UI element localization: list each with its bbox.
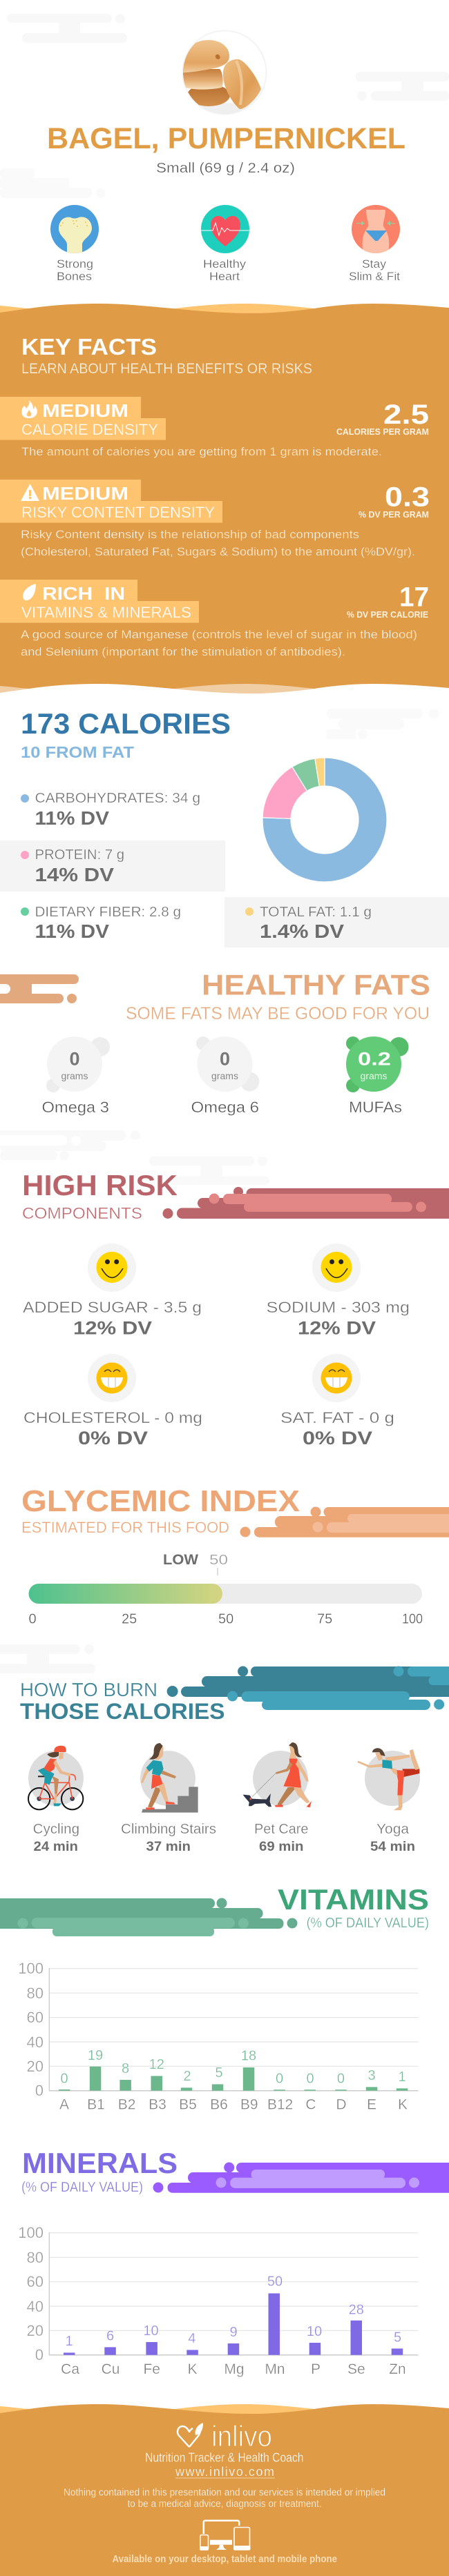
fact: risky content density: % DV PER GRAM bbox=[359, 510, 429, 520]
bar chart: vitamins: 8 bbox=[122, 2061, 129, 2076]
macro: protein bbox=[0, 840, 225, 892]
bar chart: minerals: 9 bbox=[229, 2325, 238, 2340]
risk item: added sugar: ADDED SUGAR - 3.5 g bbox=[23, 1299, 202, 1316]
bar chart: minerals: 80 bbox=[27, 2249, 44, 2266]
bar chart: minerals: Cu bbox=[102, 2361, 120, 2377]
bar chart: minerals: Fe bbox=[143, 2361, 160, 2377]
bar chart: vitamins: B9 bbox=[240, 2096, 258, 2113]
fact: risky content density bbox=[0, 480, 430, 558]
glycemic gauge: 25 bbox=[122, 1612, 137, 1627]
fact: calorie density: MEDIUM bbox=[42, 400, 128, 421]
macro: total fat bbox=[224, 897, 449, 947]
activity: yoga: Yoga bbox=[376, 1822, 410, 1837]
activity: yoga bbox=[357, 1748, 420, 1854]
fact: rich in vitamins and minerals: and Selenium (important for the stimulation of antibodies). bbox=[21, 646, 345, 658]
fact: risky content density: 0.3 bbox=[385, 482, 430, 512]
background clouds: header bbox=[0, 14, 449, 198]
risk item: cholesterol bbox=[23, 1354, 202, 1448]
fat: mufas: grams bbox=[361, 1070, 387, 1081]
macro: carbohydrates: CARBOHYDRATES: 34 g bbox=[35, 791, 200, 806]
bar chart: vitamins: 2 bbox=[183, 2069, 191, 2084]
fat: omega 3: Omega 3 bbox=[41, 1099, 109, 1116]
bar chart: minerals: 5 bbox=[394, 2330, 401, 2345]
bar chart: minerals: 100 bbox=[18, 2224, 44, 2241]
disclaimer: to be a medical advice, diagnosis or treatment. bbox=[127, 2498, 322, 2510]
fact: calorie density bbox=[0, 397, 429, 458]
macro: protein: 14% DV bbox=[35, 864, 114, 885]
subheading: healthy fats: SOME FATS MAY BE GOOD FOR YOU bbox=[126, 1004, 430, 1023]
activity: pet care: 69 min bbox=[259, 1840, 304, 1854]
fact: risky content density: Risky Content density is the relationship of bad components bbox=[21, 529, 359, 541]
heading: those calories: THOSE CALORIES bbox=[20, 1699, 225, 1724]
bar chart: vitamins: B12 bbox=[267, 2096, 293, 2113]
macro: carbohydrates bbox=[21, 791, 200, 829]
bar chart: minerals: 60 bbox=[27, 2273, 44, 2290]
macro: protein: PROTEIN: 7 g bbox=[35, 847, 124, 863]
benefit: strong bones: Strong bbox=[57, 257, 93, 271]
fat: omega 3 bbox=[41, 1036, 110, 1116]
risk item: saturated fat: SAT. FAT - 0 g bbox=[280, 1409, 394, 1426]
activity: climbing stairs bbox=[121, 1743, 216, 1854]
benefit: stay slim and fit: Slim & Fit bbox=[349, 270, 400, 283]
background cloud: burn bbox=[0, 1644, 95, 1673]
activity: pet care: Pet Care bbox=[254, 1822, 308, 1837]
website link: www.inlivo.com bbox=[175, 2465, 274, 2479]
benefit: stay slim and fit: Stay bbox=[362, 257, 386, 271]
risk item: saturated fat: 0% DV bbox=[303, 1428, 372, 1448]
bar chart: vitamins: 40 bbox=[27, 2034, 44, 2051]
bar chart: vitamins: 1 bbox=[398, 2069, 406, 2085]
glycemic gauge: 50 bbox=[209, 1553, 228, 1568]
disclaimer: Nothing contained in this presentation and our services is intended or implied bbox=[64, 2487, 385, 2498]
activity: climbing stairs: 37 min bbox=[146, 1840, 191, 1854]
glycemic gauge: 0 bbox=[29, 1612, 37, 1627]
fact: calorie density: CALORIE DENSITY bbox=[21, 421, 158, 438]
heading: minerals: MINERALS bbox=[22, 2147, 178, 2179]
section ribbon: high risk bbox=[163, 1187, 449, 1219]
risk item: sodium: SODIUM - 303 mg bbox=[267, 1299, 410, 1316]
bar chart: vitamins: 19 bbox=[88, 2048, 103, 2063]
panel: key facts bbox=[0, 304, 449, 705]
bar chart: vitamins: B6 bbox=[210, 2096, 228, 2113]
risk item: sodium bbox=[267, 1243, 410, 1339]
icon: warning bbox=[21, 484, 39, 501]
logo: inlivo bbox=[178, 2420, 272, 2453]
fat: omega 6: 0 bbox=[220, 1049, 230, 1070]
fat: mufas: 0.2 bbox=[358, 1049, 391, 1070]
fat: omega 3: grams bbox=[61, 1070, 88, 1081]
macro: dietary fiber: DIETARY FIBER: 2.8 g bbox=[35, 905, 181, 920]
serving size: Small (69 g / 2.4 oz) bbox=[156, 161, 295, 176]
bar chart: minerals: 28 bbox=[349, 2302, 364, 2317]
bar chart: minerals: 40 bbox=[27, 2298, 44, 2315]
section ribbon: glycemic index bbox=[240, 1507, 449, 1537]
bar chart: vitamins: B3 bbox=[149, 2096, 166, 2113]
macro: dietary fiber bbox=[21, 905, 181, 942]
risk item: cholesterol: CHOLESTEROL - 0 mg bbox=[23, 1409, 202, 1426]
bar chart: vitamins: B1 bbox=[87, 2096, 105, 2113]
benefit: strong bones: Bones bbox=[57, 270, 92, 283]
bar chart: vitamins: 0 bbox=[35, 2082, 44, 2099]
fat: mufas: MUFAs bbox=[349, 1099, 402, 1116]
bar chart: minerals: Zn bbox=[389, 2361, 406, 2377]
key facts heading: KEY FACTS bbox=[21, 334, 157, 360]
glycemic gauge: 50 bbox=[218, 1612, 233, 1627]
bar chart: vitamins: 80 bbox=[27, 1985, 44, 2002]
bar chart: vitamins: 20 bbox=[27, 2058, 44, 2075]
icon: flame bbox=[21, 400, 37, 418]
disclaimer bbox=[64, 2487, 385, 2510]
fact: rich in vitamins and minerals: 17 bbox=[399, 582, 429, 613]
title: BAGEL, PUMPERNICKEL bbox=[47, 122, 405, 155]
section ribbon: vitamins bbox=[0, 1898, 297, 1936]
risk item: sodium: 12% DV bbox=[298, 1318, 376, 1339]
bar chart: vitamins: 3 bbox=[367, 2068, 376, 2083]
fact: rich in vitamins and minerals: RICH IN bbox=[42, 583, 125, 604]
donut chart: macronutrients bbox=[262, 758, 387, 882]
bar chart: vitamins: B2 bbox=[118, 2096, 135, 2113]
macro: carbohydrates: 11% DV bbox=[35, 807, 109, 829]
section ribbon: burn bbox=[167, 1666, 449, 1710]
fact: calorie density: The amount of calories you are getting from 1 gram is moderate. bbox=[21, 446, 382, 458]
bar chart: vitamins: 18 bbox=[241, 2048, 256, 2063]
bar chart: vitamins: 0 bbox=[276, 2072, 283, 2087]
bar chart: vitamins: 0 bbox=[306, 2072, 314, 2087]
fact: rich in vitamins and minerals: A good source of Manganese (controls the level of sugar in the blood) bbox=[21, 629, 417, 641]
heading: vitamins: VITAMINS bbox=[278, 1883, 429, 1916]
activity: pet care bbox=[243, 1742, 312, 1854]
bar chart: vitamins: 0 bbox=[337, 2072, 345, 2087]
background clouds: high risk bbox=[0, 1130, 269, 1186]
activity: cycling bbox=[28, 1746, 84, 1854]
bar chart: minerals: 4 bbox=[188, 2331, 195, 2346]
bar chart: minerals: 0 bbox=[35, 2346, 44, 2363]
subheading: glycemic index: ESTIMATED FOR THIS FOOD bbox=[21, 1519, 229, 1536]
background cloud: calories bbox=[327, 709, 439, 739]
panel: footer bbox=[0, 2404, 449, 2576]
subheading: from fat: 10 FROM FAT bbox=[21, 743, 134, 761]
heading: glycemic index: GLYCEMIC INDEX bbox=[21, 1484, 300, 1518]
icon: leaf bbox=[23, 584, 36, 600]
fact: calorie density: CALORIES PER GRAM bbox=[336, 427, 429, 437]
heading: healthy fats: HEALTHY FATS bbox=[202, 969, 430, 1001]
key facts subheading: LEARN ABOUT HEALTH BENEFITS OR RISKS bbox=[21, 361, 312, 377]
fat: mufas bbox=[346, 1036, 409, 1116]
macro: total fat: 1.4% DV bbox=[260, 921, 344, 942]
subheading: components: COMPONENTS bbox=[22, 1204, 142, 1222]
benefit: stay slim and fit bbox=[349, 205, 400, 283]
macro: total fat: TOTAL FAT: 1.1 g bbox=[260, 905, 372, 920]
glycemic gauge: 100 bbox=[402, 1612, 423, 1627]
benefit: healthy heart: Heart bbox=[209, 270, 240, 283]
subheading: vitamins: (% OF DAILY VALUE) bbox=[307, 1916, 429, 1931]
bar chart: minerals bbox=[18, 2224, 419, 2377]
bar chart: vitamins: C bbox=[305, 2096, 316, 2113]
bar chart: minerals: Ca bbox=[61, 2361, 79, 2377]
icon: devices bbox=[200, 2521, 250, 2550]
bar chart: minerals: 50 bbox=[267, 2274, 283, 2290]
glycemic gauge: 75 bbox=[317, 1612, 332, 1627]
bar chart: minerals: P bbox=[311, 2361, 321, 2377]
bar chart: minerals: 20 bbox=[27, 2322, 44, 2339]
bar chart: vitamins: E bbox=[367, 2096, 376, 2113]
tagline: Nutrition Tracker & Health Coach bbox=[145, 2451, 304, 2465]
fat: omega 6 bbox=[191, 1036, 260, 1116]
fat: omega 6: Omega 6 bbox=[191, 1099, 259, 1116]
risk item: cholesterol: 0% DV bbox=[78, 1428, 148, 1448]
bar chart: minerals: 10 bbox=[307, 2324, 322, 2339]
glycemic gauge: LOW bbox=[163, 1552, 198, 1568]
section ribbon: healthy fats bbox=[0, 974, 79, 1003]
bar chart: minerals: Se bbox=[347, 2361, 365, 2377]
bar chart: vitamins: 100 bbox=[18, 1960, 44, 1977]
heading: calories: 173 CALORIES bbox=[21, 707, 231, 740]
bar chart: minerals: Mg bbox=[224, 2361, 245, 2377]
fact: rich in vitamins and minerals bbox=[0, 580, 429, 658]
fact: risky content density: RISKY CONTENT DENSITY bbox=[21, 504, 215, 521]
activity: cycling: 24 min bbox=[33, 1840, 78, 1854]
bar chart: minerals: 6 bbox=[106, 2328, 114, 2343]
fat: omega 3: 0 bbox=[69, 1049, 80, 1070]
heading: high risk: HIGH RISK bbox=[22, 1169, 178, 1201]
bar chart: vitamins: D bbox=[336, 2096, 347, 2113]
availability note: Available on your desktop, tablet and mobile phone bbox=[112, 2553, 337, 2565]
fact: calorie density: 2.5 bbox=[383, 400, 429, 430]
bar chart: vitamins: A bbox=[59, 2096, 69, 2113]
benefit: healthy heart: Healthy bbox=[203, 257, 247, 271]
bar chart: vitamins: 12 bbox=[149, 2057, 164, 2072]
risk item: added sugar bbox=[23, 1243, 202, 1339]
glycemic gauge bbox=[29, 1552, 423, 1627]
macro: dietary fiber: 11% DV bbox=[35, 921, 109, 942]
risk item: saturated fat bbox=[280, 1354, 394, 1448]
bar chart: minerals: 1 bbox=[65, 2334, 73, 2349]
activity: cycling: Cycling bbox=[33, 1822, 79, 1837]
activity: climbing stairs: Climbing Stairs bbox=[121, 1822, 216, 1837]
bar chart: minerals: K bbox=[188, 2361, 198, 2377]
benefit: healthy heart bbox=[201, 205, 249, 283]
logo: inlivo: inlivo bbox=[211, 2420, 272, 2453]
fact: risky content density: (Cholesterol, Saturated Fat, Sugars & Sodium) to the amount (%DV/gr). bbox=[21, 546, 415, 558]
fact: rich in vitamins and minerals: % DV PER CALORIE bbox=[347, 610, 428, 620]
bar chart: vitamins: 5 bbox=[215, 2065, 223, 2081]
fact: rich in vitamins and minerals: VITAMINS & MINERALS bbox=[21, 604, 191, 621]
fact: risky content density: MEDIUM bbox=[42, 483, 128, 504]
bar chart: minerals: 10 bbox=[143, 2323, 159, 2339]
bar chart: vitamins bbox=[18, 1960, 419, 2113]
heading: how to burn: HOW TO BURN bbox=[20, 1679, 157, 1700]
subheading: minerals: (% OF DAILY VALUE) bbox=[21, 2180, 143, 2195]
bar chart: vitamins: 0 bbox=[60, 2072, 68, 2087]
fat: omega 6: grams bbox=[211, 1070, 238, 1081]
section ribbon: minerals bbox=[153, 2163, 449, 2193]
food photo: bagels bbox=[180, 30, 267, 115]
benefit: strong bones bbox=[50, 205, 99, 283]
risk item: added sugar: 12% DV bbox=[73, 1318, 152, 1339]
bar chart: vitamins: K bbox=[398, 2096, 408, 2113]
bar chart: vitamins: B5 bbox=[179, 2096, 197, 2113]
bar chart: vitamins: 60 bbox=[27, 2009, 44, 2026]
activity: yoga: 54 min bbox=[370, 1840, 415, 1854]
bar chart: minerals: Mn bbox=[265, 2361, 285, 2377]
